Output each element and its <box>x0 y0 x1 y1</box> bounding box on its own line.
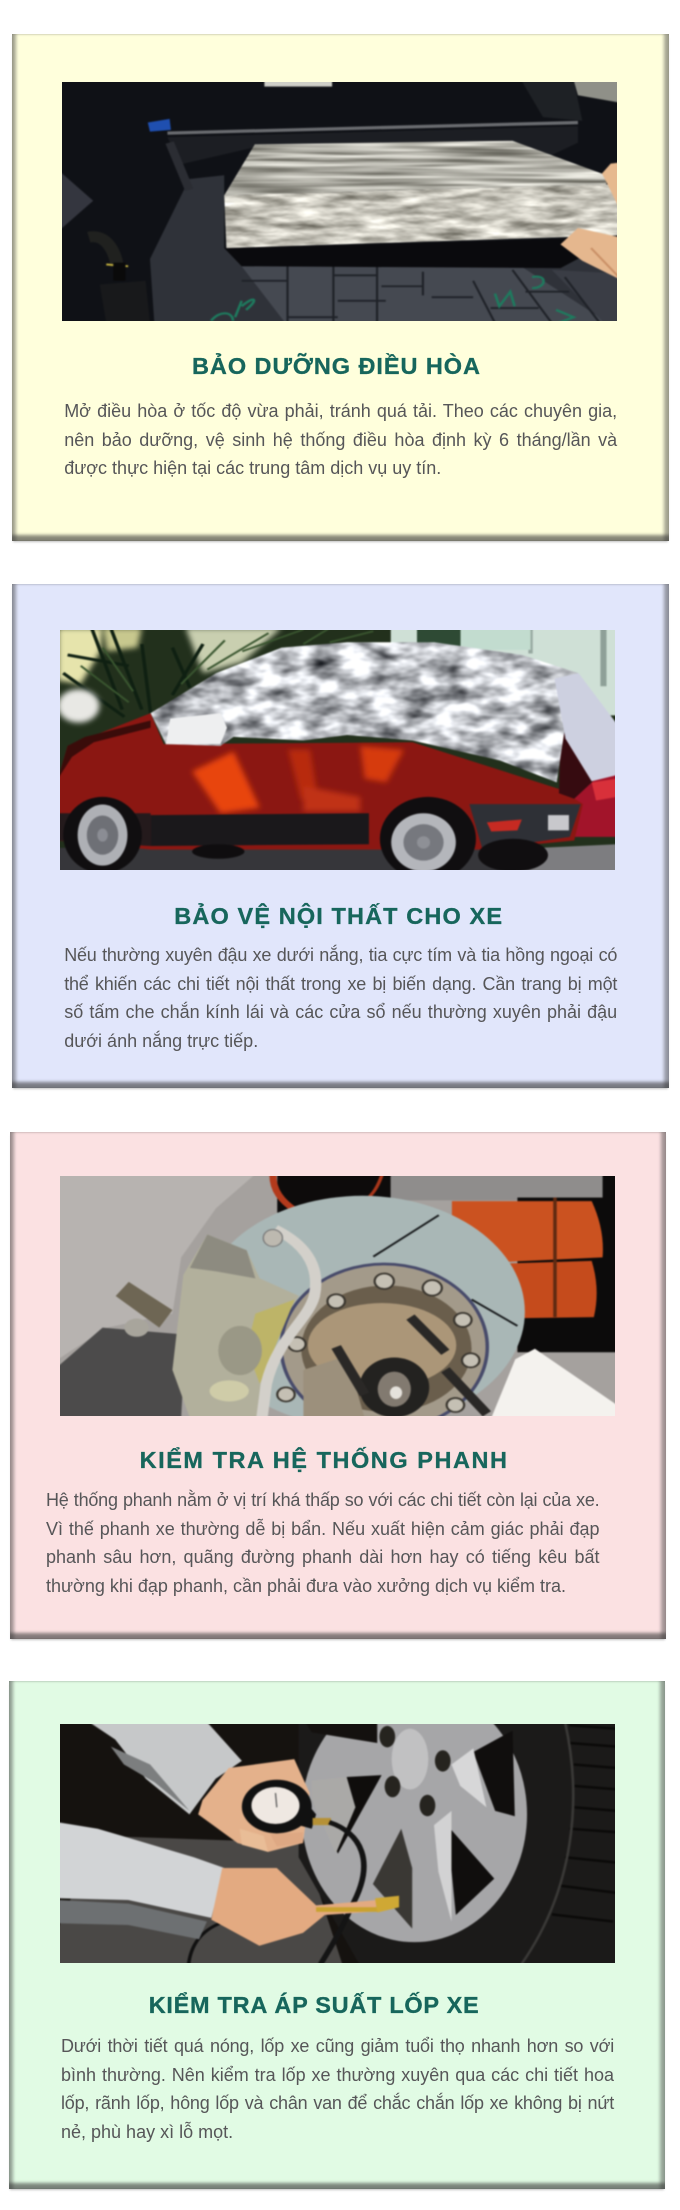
text: air conditioning: nên bảo dưỡng, vệ sinh hệ thống điều hòa định kỳ 6 tháng/lần và <box>64 430 617 450</box>
text: air conditioning <box>64 401 618 478</box>
text: brake system: Hệ thống phanh nằm ở vị trí khá thấp so với các chi tiết còn lại của xe. <box>46 1490 600 1510</box>
text: air conditioning: được thực hiện tại các trung tâm dịch vụ uy tín. <box>64 458 441 478</box>
text: interior protection: số tấm che chắn kính lái và các cửa sổ nếu thường xuyên phải đậu <box>64 1002 617 1022</box>
photo: cabin air filter <box>62 82 617 321</box>
panel: tire pressure check <box>9 1681 665 2189</box>
text: interior protection <box>64 944 618 1051</box>
text: brake system: phanh sâu hơn, quãng đường phanh dài hơn hay có tiếng kêu bất <box>46 1547 600 1567</box>
text: interior protection: dưới ánh nắng trực tiếp. <box>64 1031 258 1051</box>
text: brake system <box>46 1490 600 1596</box>
text: air conditioning: Mở điều hòa ở tốc độ vừa phải, tránh quá tải. Theo các chuyên gia, <box>64 401 617 421</box>
text: tire pressure: nẻ, phù hay xì lỗ mọt. <box>61 2122 233 2142</box>
panel: air conditioning maintenance <box>12 34 669 541</box>
photo: checking tire pressure with gauge <box>60 1724 615 1963</box>
title: brake system: KIỂM TRA HỆ THỐNG PHANH <box>140 1446 507 1473</box>
text: brake system: thường khi đạp phanh, cần phải đưa vào xưởng dịch vụ kiểm tra. <box>46 1576 566 1596</box>
text: tire pressure: bình thường. Nên kiểm tra lốp xe thường xuyên qua các chi tiết hoa <box>61 2065 614 2085</box>
title: tire pressure: KIỂM TRA ÁP SUẤT LỐP XE <box>149 1990 479 2018</box>
text: interior protection: Nếu thường xuyên đậu xe dưới nắng, tia cực tím và tia hồng ngoại có <box>64 945 617 965</box>
photo: brake disc and caliper <box>60 1176 615 1416</box>
title: air conditioning: BẢO DƯỠNG ĐIỀU HÒA <box>192 351 480 379</box>
text: brake system: Vì thế phanh xe thường dễ bị bẩn. Nếu xuất hiện cảm giác phải đạp <box>46 1519 600 1539</box>
title: interior protection: BẢO VỆ NỘI THẤT CHO XE <box>174 900 502 928</box>
panel: protect car interior <box>12 584 669 1088</box>
text: tire pressure <box>61 2036 614 2142</box>
text: tire pressure: lốp, rãnh lốp, hông lốp và chân van để chắc chắn lốp xe không bị nứt <box>61 2093 614 2113</box>
text: interior protection: thể khiến các chi tiết nội thất trong xe bị biến dạng. Cần trang bị một <box>64 974 617 994</box>
photo: car under silver cover <box>60 630 615 870</box>
panel: brake system check <box>10 1132 666 1639</box>
text: tire pressure: Dưới thời tiết quá nóng, lốp xe cũng giảm tuổi thọ nhanh hơn so với <box>61 2036 614 2056</box>
